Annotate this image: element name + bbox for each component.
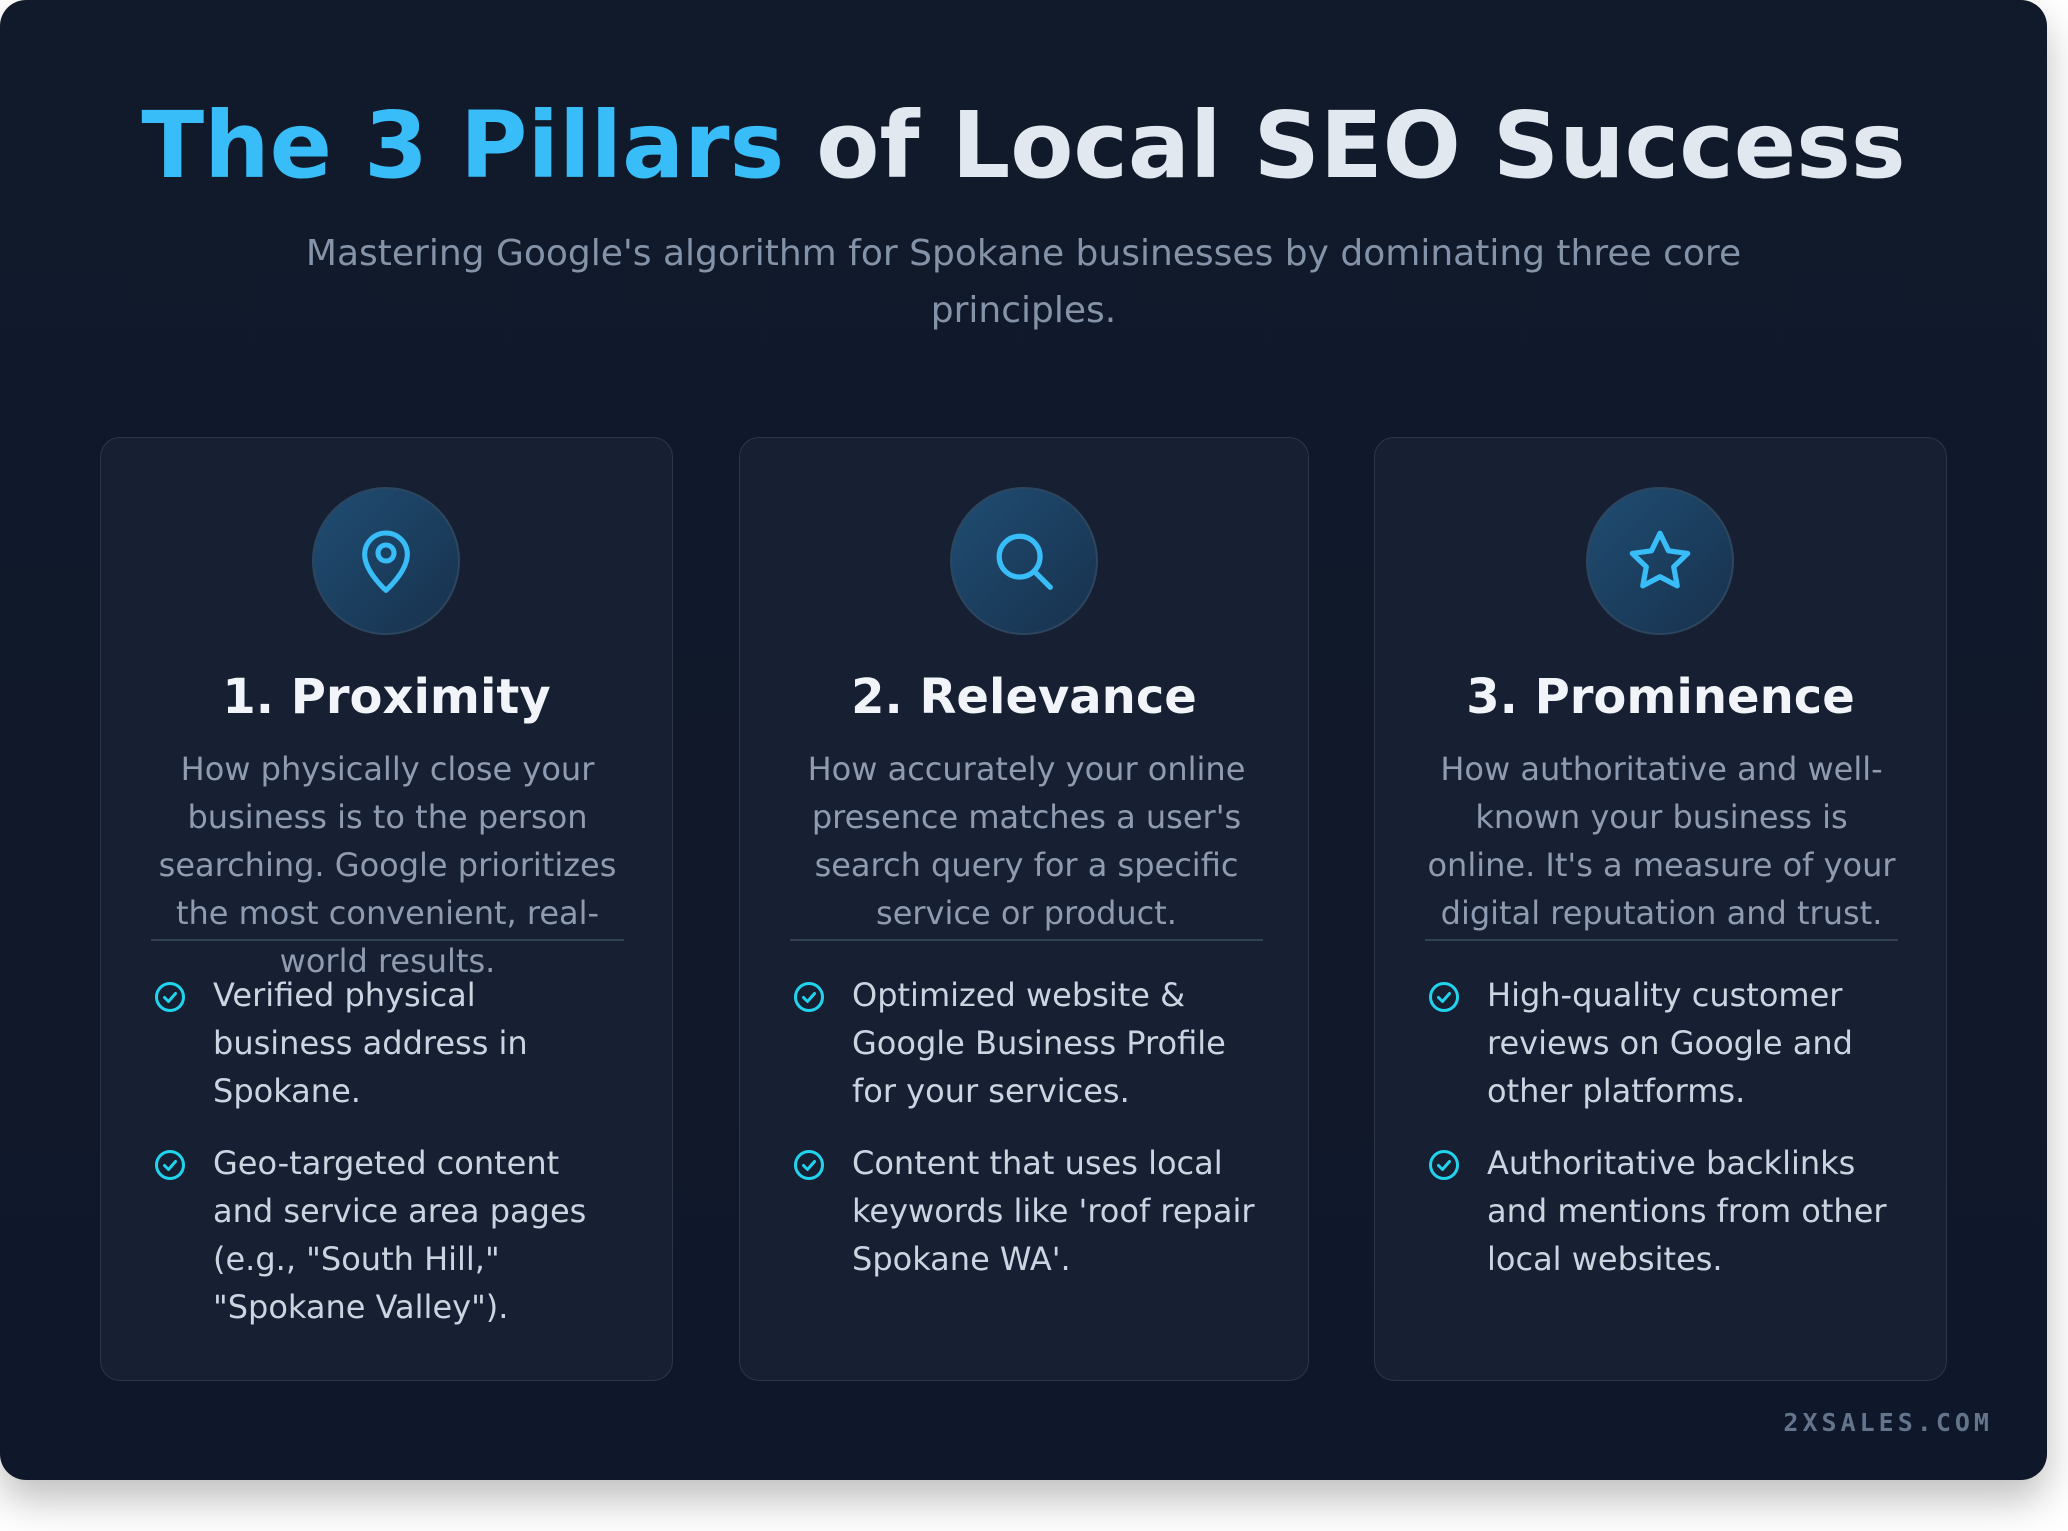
description: How physically close your business is to the person searching. Google prioritizes the most convenient, real-world results. — [159, 750, 616, 980]
subtitle: Mastering Google's algorithm for Spokane businesses by dominating three core principles. — [306, 233, 1741, 331]
heading: 1. Proximity — [222, 669, 551, 725]
list: Authoritative backlinks and mentions from other local websites. — [1487, 1144, 1887, 1278]
list: Optimized website & Google Business Profile for your services. — [852, 976, 1226, 1110]
heading: 2. Relevance — [851, 669, 1197, 725]
icon: map pin — [312, 487, 460, 635]
list: Content that uses local keywords like 'roof repair Spokane WA'. — [852, 1144, 1254, 1278]
icon: search — [950, 487, 1098, 635]
description: How authoritative and well-known your business is online. It's a measure of your digital reputation and trust. — [1427, 750, 1896, 932]
list: Geo-targeted content and service area pages (e.g., "South Hill," "Spokane Valley"). — [213, 1144, 586, 1326]
list — [1429, 976, 1887, 1278]
icon: star — [1586, 487, 1734, 635]
list — [155, 976, 586, 1326]
panel: prominence — [1374, 437, 1947, 1381]
title: The 3 Pillars of Local SEO Success — [141, 92, 1906, 199]
footer brand: 2XSALES.COM — [1783, 1408, 1993, 1437]
panel: relevance — [739, 437, 1309, 1381]
heading: 3. Prominence — [1466, 669, 1855, 725]
panel: proximity — [100, 437, 673, 1381]
list — [794, 976, 1255, 1278]
description: How accurately your online presence matches a user's search query for a specific service or product. — [808, 750, 1245, 932]
list: High-quality customer reviews on Google and other platforms. — [1487, 976, 1853, 1110]
list: Verified physical business address in Spokane. — [213, 976, 528, 1110]
